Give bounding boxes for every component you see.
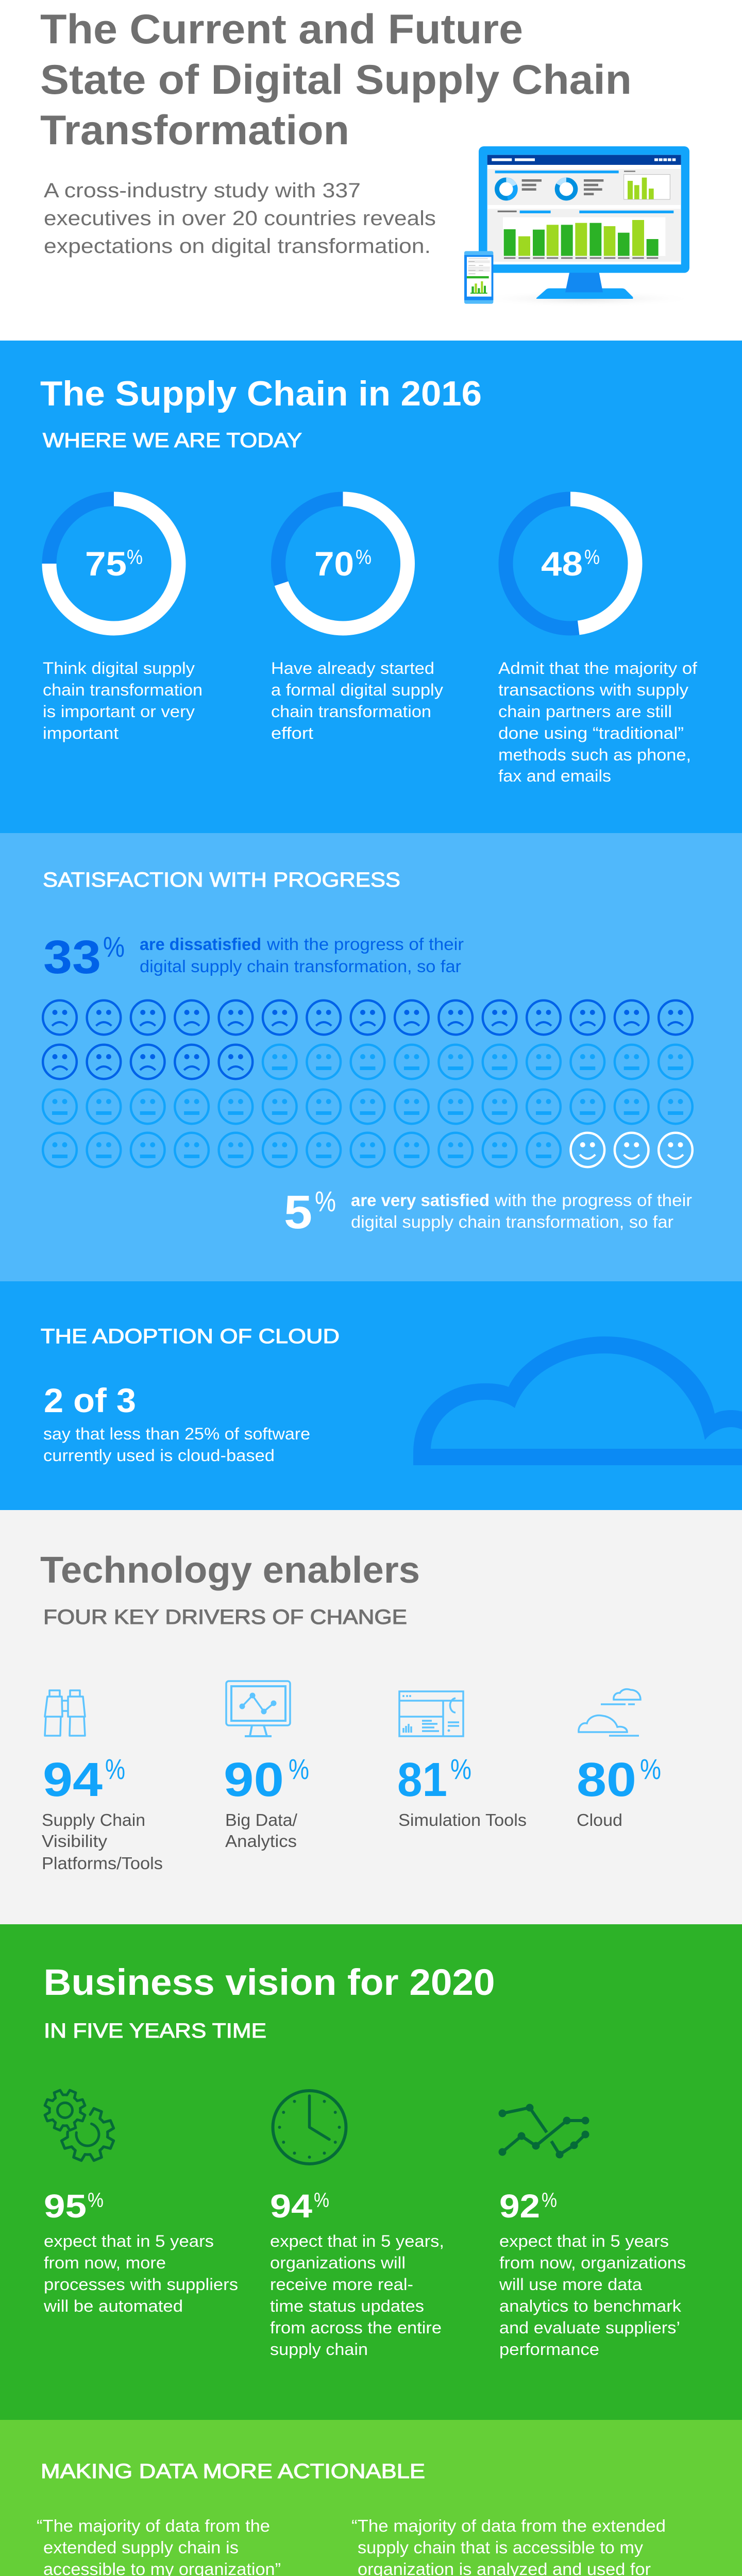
stat: 81%: 81 xyxy=(397,1753,447,1806)
heading: The Supply Chain in 2016 xyxy=(40,374,482,413)
stat: 92% xyxy=(499,2188,557,2225)
text block: 94% caption: organizations will xyxy=(270,2253,406,2272)
text block: 48% caption: transactions with supply xyxy=(498,681,688,699)
text block: 70% caption xyxy=(271,659,443,742)
panel: business vision for 2020 xyxy=(0,1924,742,2420)
text block: 70% caption: chain transformation xyxy=(271,702,431,721)
title xyxy=(40,6,632,154)
stat: 81%: % xyxy=(450,1753,471,1785)
donut: 75%: 75 xyxy=(85,545,127,583)
quote: accessible data: extended supply chain is xyxy=(43,2538,239,2557)
icon: binoculars xyxy=(45,1690,85,1736)
quote: accessible data: “The majority of data from the xyxy=(37,2516,270,2535)
text block: 94% caption: expect that in 5 years, xyxy=(270,2232,444,2250)
panel: satisfaction with progress xyxy=(0,833,742,1281)
stat: 5% very satisfied: 5 xyxy=(284,1186,312,1239)
label: supply chain visibility xyxy=(42,1810,163,1873)
text block: 94% caption: from across the entire xyxy=(270,2318,442,2337)
text block: 75% caption xyxy=(43,659,203,742)
stat: 33% dissatisfied: 33 xyxy=(43,931,101,984)
panel: the supply chain in 2016 xyxy=(0,341,742,833)
icon: gears xyxy=(43,2089,116,2163)
icon: analytics monitor xyxy=(226,1681,290,1736)
title: Transformation xyxy=(40,107,349,154)
icon: line chart xyxy=(499,2104,589,2159)
text block: 92% caption: from now, organizations xyxy=(499,2253,686,2272)
text block: 92% caption: expect that in 5 years xyxy=(499,2232,669,2250)
stat: 94% xyxy=(43,1753,125,1806)
subtitle text: A cross-industry study with 337 xyxy=(44,179,361,202)
stat: 5% very satisfied: % xyxy=(315,1185,336,1217)
label: big data analytics: Big Data/ xyxy=(225,1810,298,1829)
icon: clouds xyxy=(579,1689,640,1736)
panel: the adoption of cloud xyxy=(0,1281,742,1510)
subheading: FOUR KEY DRIVERS OF CHANGE xyxy=(43,1606,407,1629)
stat: 95% xyxy=(44,2188,104,2225)
text block: 95% caption: expect that in 5 years xyxy=(44,2232,214,2250)
heading: Business vision for 2020 xyxy=(43,1962,495,2003)
donut: 75% xyxy=(49,499,178,629)
stat: 94%: 94 xyxy=(270,2188,312,2225)
stat: 33% dissatisfied: digital supply chain transformation, so far xyxy=(140,957,461,976)
text block: 70% caption: effort xyxy=(271,724,313,742)
face grid: 33% sad, 62% neutral, 5% happy xyxy=(43,1001,693,1167)
heading: MAKING DATA MORE ACTIONABLE xyxy=(41,2460,425,2483)
text block: 92% caption: analytics to benchmark xyxy=(499,2297,682,2315)
stat: 92%: 92 xyxy=(499,2188,540,2225)
text block: 48% caption xyxy=(498,659,697,785)
stat: 5% very satisfied: digital supply chain transformation, so far xyxy=(351,1212,673,1231)
donut: 70%: 70 xyxy=(314,545,354,583)
label: supply chain visibility: Visibility xyxy=(42,1832,108,1851)
text block: 95% caption xyxy=(43,2232,238,2315)
quote: analyzed data: supply chain that is accessible to my xyxy=(358,2538,644,2557)
text block: 94% caption: time status updates xyxy=(270,2297,424,2315)
text block: cloud caption: currently used is cloud-based xyxy=(43,1446,275,1465)
label: simulation tools: Simulation Tools xyxy=(398,1810,527,1829)
text block: cloud caption xyxy=(43,1425,310,1465)
donut: 48%: 48 xyxy=(541,545,583,583)
icon: dashboard monitor and phone xyxy=(464,146,696,308)
subtitle text: expectations on digital transformation. xyxy=(44,235,431,258)
subheading: IN FIVE YEARS TIME xyxy=(44,2020,266,2042)
stat: 80%: % xyxy=(640,1753,661,1785)
text block: 70% caption: a formal digital supply xyxy=(271,681,443,699)
stat: 80% xyxy=(577,1753,661,1806)
text block: 48% caption: fax and emails xyxy=(498,767,611,785)
text block: 92% caption: performance xyxy=(499,2340,599,2359)
panel: making data more actionable xyxy=(0,2420,742,2576)
quote: analyzed data xyxy=(351,2516,666,2576)
text block: 75% caption: important xyxy=(43,724,119,742)
stat: 94%: 94 xyxy=(43,1753,103,1806)
stat: 92%: % xyxy=(542,2189,557,2212)
text block: 95% caption: from now, more xyxy=(44,2253,166,2272)
heading: THE ADOPTION OF CLOUD xyxy=(41,1325,340,1348)
donut: 75%: % xyxy=(127,546,143,569)
stat: 90% xyxy=(224,1753,309,1806)
text block: 92% caption: and evaluate suppliers’ xyxy=(499,2318,680,2337)
stat: 33% dissatisfied xyxy=(43,930,464,984)
stat: 95%: 95 xyxy=(44,2188,87,2225)
donut: 70%: % xyxy=(356,546,372,569)
text block: 94% caption xyxy=(270,2232,444,2359)
text block: 95% caption: processes with suppliers xyxy=(44,2275,238,2294)
text block: 95% caption: will be automated xyxy=(43,2297,183,2315)
text block: 75% caption: chain transformation xyxy=(43,681,203,699)
icon: simulation window xyxy=(399,1691,463,1736)
stat: 33% dissatisfied: are dissatisfied xyxy=(140,935,261,954)
icon: clock xyxy=(273,2091,346,2164)
icon: large cloud outline xyxy=(413,1336,742,1465)
stat: 90%: 90 xyxy=(224,1753,284,1806)
title: The Current and Future xyxy=(40,6,523,53)
text block: 48% caption: done using “traditional” xyxy=(498,724,684,742)
stat: 90%: % xyxy=(289,1753,309,1785)
stat: 2 of 3: 2 of 3 xyxy=(44,1381,136,1419)
donut: 48% xyxy=(506,499,635,629)
stat: 94%: % xyxy=(314,2189,329,2212)
panel: technology enablers xyxy=(0,1510,742,1924)
text block: 92% caption: will use more data xyxy=(499,2275,642,2294)
text block: 48% caption: chain partners are still xyxy=(498,702,672,721)
heading: Technology enablers xyxy=(40,1550,420,1591)
text block: 94% caption: supply chain xyxy=(270,2340,368,2359)
panel: header xyxy=(0,0,742,341)
quote: analyzed data: “The majority of data from the extended xyxy=(351,2516,666,2535)
heading: SATISFACTION WITH PROGRESS xyxy=(43,869,400,891)
text block: 75% caption: Think digital supply xyxy=(43,659,195,677)
text block: 92% caption xyxy=(499,2232,686,2359)
stat: 5% very satisfied xyxy=(284,1185,692,1239)
donut: 48%: % xyxy=(584,546,600,569)
stat: 80%: 80 xyxy=(577,1753,636,1806)
stat: 94%: % xyxy=(105,1753,125,1785)
text block: 94% caption: receive more real- xyxy=(270,2275,413,2294)
donut: 70% xyxy=(278,499,408,629)
stat: 95%: % xyxy=(88,2189,104,2212)
label: big data analytics xyxy=(225,1810,298,1851)
label: cloud: Cloud xyxy=(577,1810,622,1829)
subtitle text xyxy=(44,179,436,258)
stat: 33% dissatisfied: with the progress of their xyxy=(266,935,464,954)
text block: cloud caption: say that less than 25% of software xyxy=(43,1425,310,1443)
quote: accessible data xyxy=(37,2516,281,2576)
stat: 94% xyxy=(270,2188,329,2225)
stat: 33% dissatisfied: % xyxy=(103,930,125,963)
stat: 5% very satisfied: with the progress of their xyxy=(494,1191,692,1210)
label: big data analytics: Analytics xyxy=(225,1832,297,1851)
stat: 5% very satisfied: are very satisfied xyxy=(351,1191,490,1210)
title: State of Digital Supply Chain xyxy=(40,57,632,103)
subheading: WHERE WE ARE TODAY xyxy=(43,429,302,452)
text block: 75% caption: is important or very xyxy=(43,702,195,721)
text block: 70% caption: Have already started xyxy=(271,659,434,677)
subtitle text: executives in over 20 countries reveals xyxy=(44,207,436,230)
text block: 48% caption: methods such as phone, xyxy=(498,745,691,764)
text block: 48% caption: Admit that the majority of xyxy=(498,659,697,677)
label: supply chain visibility: Platforms/Tools xyxy=(42,1854,163,1873)
label: supply chain visibility: Supply Chain xyxy=(42,1810,145,1829)
